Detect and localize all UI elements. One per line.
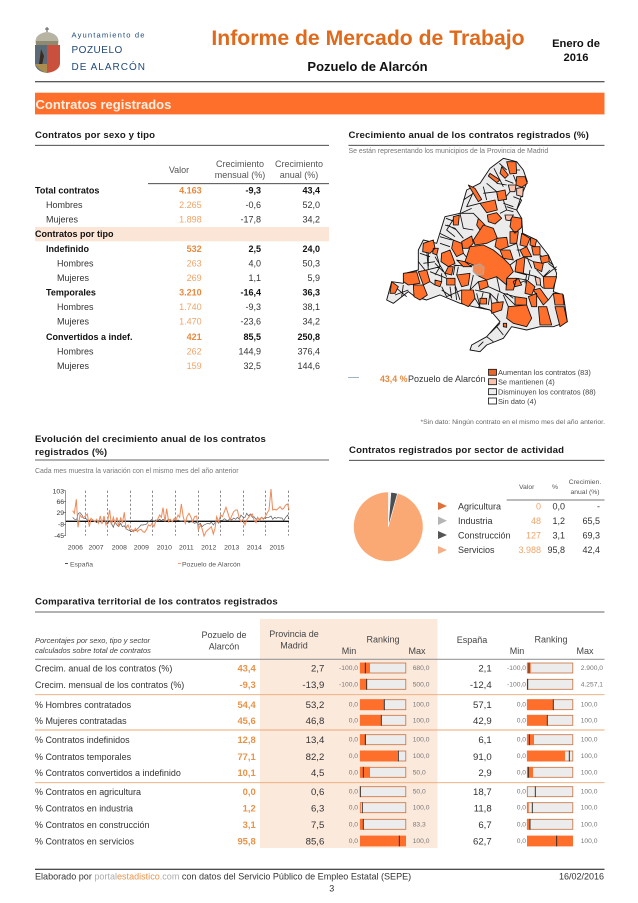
ranking bars: Madrid: 100,0: [413, 805, 430, 812]
table rows: 34,2: [302, 214, 320, 224]
table rows: Mujeres: [57, 316, 90, 326]
section banner: Contratos registrados: [36, 97, 171, 112]
icon: triangle markers: [438, 502, 447, 554]
map note: Se están representando los municipios de la Provincia de Madrid: [348, 148, 548, 155]
ranking bars: Madrid: -100,0: [339, 665, 358, 672]
table header: [169, 159, 323, 180]
logo: Ayuntamiento de Pozuelo de Alarcón: DE ALARCÓN: [72, 60, 146, 73]
table rows: 1.470: [179, 316, 202, 326]
logo: Ayuntamiento de Pozuelo de Alarcón: [35, 27, 146, 73]
table header: Min: [342, 646, 356, 656]
ranking bars: España: 100,0: [581, 821, 598, 828]
ranking bars: España: 0,0: [517, 838, 526, 845]
España values: 2,1: [478, 664, 492, 674]
table header: Ranking: [366, 634, 400, 644]
Madrid values: -13,9: [302, 680, 324, 691]
ranking bars: Madrid: 680,0: [413, 665, 430, 672]
line chart: 29: [56, 510, 64, 517]
table rows: 52,0: [302, 200, 320, 210]
ranking bars: Madrid: 0,0: [349, 737, 358, 744]
España values: 6,1: [478, 735, 492, 746]
panel: comparativa territorial: [35, 596, 604, 848]
table rows: 5,9: [307, 273, 320, 283]
sector table: Construcción: [458, 530, 511, 540]
icon: coat of arms: [35, 27, 60, 73]
table rows: Hombres: [46, 200, 83, 210]
line chart: [53, 488, 289, 568]
table rows: Hombres: [57, 346, 94, 356]
ranking bars: Madrid: 83,3: [413, 821, 426, 828]
table rows: Mujeres: [57, 361, 90, 371]
ranking bars: Madrid: 0,0: [349, 838, 358, 845]
sector table: 65,5: [582, 516, 600, 526]
line chart: 103: [53, 488, 64, 496]
ranking bars: Madrid: 100,0: [413, 737, 430, 744]
España values: 42,9: [473, 716, 492, 727]
table rows: Convertidos a indef.: [46, 332, 133, 342]
ranking bars: Madrid: 0,0: [349, 769, 358, 776]
table rows: -16,4: [240, 288, 261, 298]
chart legend: [65, 562, 241, 568]
Madrid values: 46,8: [306, 716, 324, 727]
table rows: 421: [187, 332, 202, 342]
ranking bars: España: 0,0: [517, 789, 526, 796]
España values: 57,1: [473, 700, 492, 711]
heading: registrados (%): [35, 447, 107, 458]
row labels: Crecim. anual de los contratos (%): [35, 664, 172, 674]
sector table: 1,2: [552, 516, 565, 526]
ranking bars: España: 0,0: [517, 717, 526, 724]
row labels: % Contratos en construcción: [35, 820, 149, 830]
Pozuelo values: [237, 662, 256, 846]
table rows: -0,6: [245, 200, 261, 210]
sector table: 48: [531, 516, 541, 526]
table rows: 269: [187, 273, 202, 283]
Madrid values: [302, 664, 325, 848]
ranking bars: Madrid: 100,0: [413, 717, 430, 724]
ranking bars: España: 100,0: [581, 789, 598, 796]
ranking bars: Madrid: 0,0: [349, 717, 358, 724]
table rows: 376,4: [297, 346, 320, 356]
map legend: categories: Aumentan los contratos (83): [498, 368, 591, 377]
highlighted municipality: Pozuelo de Alarcón: [473, 264, 484, 275]
ranking bars: España: 100,0: [581, 769, 598, 776]
sector table: Crecimien.: [569, 479, 601, 486]
line chart: 66: [56, 499, 64, 506]
table rows: 3.210: [179, 288, 202, 298]
table header: Porcentajes por sexo, tipo y sector: [35, 636, 151, 645]
España values: 2,9: [478, 768, 492, 779]
sector table: %: [552, 484, 558, 491]
footer: 3: [329, 884, 334, 894]
row labels: % Contratos temporales: [35, 752, 132, 762]
map legend: categories: [488, 368, 596, 406]
map legend: Pozuelo value: [348, 374, 486, 384]
ranking bars: España: 0,0: [517, 702, 526, 709]
sector table: 0,0: [552, 502, 565, 512]
table rows: 2.265: [179, 200, 202, 210]
row labels: Crecim. mensual de los contratos (%): [35, 680, 184, 690]
table rows: 263: [187, 258, 202, 268]
Pozuelo values: 0,0: [243, 786, 256, 797]
panel: crecimiento anual map: [348, 130, 605, 426]
panel: contratos por sector de actividad: [349, 445, 604, 561]
series: España: [73, 513, 289, 532]
Pozuelo values: 54,4: [237, 699, 256, 710]
table header: Max: [576, 646, 594, 656]
sector table: -: [597, 502, 600, 512]
table header: Pozuelo de: [201, 630, 247, 640]
ranking bars: Madrid: -100,0: [339, 681, 358, 688]
table rows: Temporales: [46, 288, 96, 298]
table header: calculados sobre total de contratos: [35, 646, 151, 655]
table rows: 144,9: [238, 346, 261, 356]
row labels: % Contratos convertidos a indefinido: [35, 768, 181, 778]
panel: contratos por sexo y tipo: [35, 130, 329, 371]
table header: Max: [408, 646, 426, 656]
España values: 91,0: [473, 752, 492, 763]
table rows: 36,3: [302, 288, 320, 298]
table header: España: [457, 635, 487, 645]
España values: -12,4: [470, 680, 492, 691]
table rows: 144,6: [297, 361, 320, 371]
heading: Crecimiento anual de los contratos registrados (%): [348, 130, 589, 141]
table header: Ranking: [534, 634, 568, 644]
chart legend: Pozuelo de Alarcón: [182, 562, 241, 568]
table header: Crecimiento: [275, 159, 323, 169]
ranking bars: España: 0,0: [517, 769, 526, 776]
table rows: Hombres: [57, 258, 94, 268]
line chart: 2010: [157, 544, 172, 552]
table rows: -17,8: [240, 214, 261, 224]
ranking bars: España: 0,0: [517, 737, 526, 744]
logo: Ayuntamiento de Pozuelo de Alarcón: Ayuntamiento de: [72, 30, 146, 40]
Pozuelo values: 95,8: [237, 836, 256, 846]
sector table: Agricultura: [458, 502, 501, 512]
date: 2016: [564, 52, 588, 64]
table rows: 4,0: [248, 258, 261, 268]
table rows: 532: [187, 244, 202, 254]
line chart: 2011: [179, 544, 194, 552]
Pozuelo values: 1,2: [243, 802, 256, 814]
ranking bars: Madrid: 50,0: [413, 769, 426, 776]
Madrid values: 7,5: [311, 820, 324, 831]
Pozuelo values: -9,3: [240, 679, 256, 690]
map legend: Pozuelo value: Pozuelo de Alarcón: [408, 374, 486, 384]
table rows: Indefinido: [46, 244, 89, 254]
row labels: % Hombres contratados: [35, 700, 132, 710]
Provincia de Madrid column background: [260, 619, 438, 848]
map legend: Pozuelo value: 43,4 %: [380, 374, 408, 384]
sector table: anual (%): [570, 489, 600, 496]
table rows: 1.740: [179, 302, 202, 312]
Madrid values: 6,3: [311, 804, 324, 814]
ranking bars: España: 100,0: [581, 737, 598, 744]
table rows: 85,5: [243, 332, 261, 342]
ranking bars: España: 100,0: [581, 717, 598, 724]
date: Enero de: [552, 38, 600, 50]
table rows: 24,0: [302, 244, 320, 254]
ranking bars: Madrid: 0,0: [349, 789, 358, 796]
sector table: 3,1: [552, 530, 565, 540]
España values: 11,8: [474, 804, 492, 814]
row labels: % Contratos en industria: [35, 804, 133, 814]
Pozuelo values: 12,8: [237, 734, 256, 745]
ranking bars: España: 0,0: [517, 805, 526, 812]
ranking bars: Madrid: 0,0: [349, 805, 358, 812]
table rows: 1.898: [179, 214, 202, 224]
table header: Provincia de: [269, 629, 319, 639]
heading: [35, 434, 266, 458]
map of Madrid municipalities: [387, 158, 567, 352]
row labels: [35, 664, 184, 846]
ranking bars: Madrid: 500,0: [413, 681, 430, 688]
España values: [470, 664, 492, 848]
table rows: Mujeres: [57, 273, 90, 283]
ranking bars: Madrid: [339, 663, 430, 846]
Madrid values: 82,2: [306, 752, 324, 763]
table header: Min: [510, 646, 524, 656]
ranking bars: Madrid: 100,0: [413, 753, 430, 760]
table rows: 32,5: [243, 361, 261, 371]
table header: Madrid: [280, 640, 308, 650]
table rows: 262: [187, 346, 202, 356]
sector table: Servicios: [458, 545, 495, 555]
heading: Contratos por sexo y tipo: [35, 130, 155, 141]
table rows: -9,3: [245, 302, 261, 312]
line chart: 2012: [201, 544, 216, 552]
chart legend: España: [70, 562, 93, 568]
sector table: [438, 479, 604, 555]
table rows: Contratos por tipo: [35, 229, 114, 239]
Pozuelo values: 10,1: [237, 767, 256, 778]
table header: Crecimiento: [216, 159, 264, 169]
footer: Elaborado por portalestadistico.com con datos del Servicio Público de Empleo Estatal (SEPE): [35, 872, 411, 882]
sector table: 3.988: [518, 545, 541, 555]
table rows: Total contratos: [35, 186, 99, 196]
table rows: 1,1: [248, 273, 261, 283]
Pozuelo values: 45,6: [237, 715, 256, 726]
title: Informe de Mercado de Trabajo: [211, 27, 525, 50]
table rows: Hombres: [57, 302, 94, 312]
table rows: 34,2: [302, 316, 320, 326]
line chart: 2013: [224, 544, 239, 552]
ranking bars: España: 0,0: [517, 753, 526, 760]
Madrid values: 0,6: [311, 787, 324, 798]
map footnote: *Sin dato: Ningún contrato en el mismo mes del año anterior.: [420, 419, 605, 426]
ranking bars: Madrid: 0,0: [349, 702, 358, 709]
ranking bars: Madrid: 100,0: [413, 702, 430, 709]
Madrid values: 2,7: [311, 664, 324, 674]
row labels: % Contratos en agricultura: [35, 787, 141, 797]
subtitle: Pozuelo de Alarcón: [307, 59, 428, 74]
footer: [35, 869, 604, 894]
ranking bars: España: 0,0: [517, 821, 526, 828]
line chart: 2007: [88, 544, 104, 552]
line chart: 2006: [68, 544, 83, 552]
España values: 6,7: [478, 820, 492, 831]
sector table: 127: [526, 530, 541, 540]
ranking bars: Madrid: 100,0: [413, 838, 430, 845]
ranking bars: España: 2.900,0: [581, 665, 603, 672]
line chart: 2008: [112, 544, 127, 552]
Madrid values: 13,4: [306, 735, 325, 746]
Madrid values: 53,2: [306, 700, 324, 711]
table rows: Mujeres: [46, 214, 79, 224]
heading: Evolución del crecimiento anual de los contratos: [35, 434, 266, 445]
table rows: -9,3: [245, 186, 261, 196]
footer: 16/02/2016: [559, 872, 604, 882]
row labels: % Contratos en servicios: [35, 836, 135, 846]
logo: Ayuntamiento de Pozuelo de Alarcón: POZUELO: [72, 45, 123, 56]
line chart: 2009: [134, 544, 149, 552]
Pozuelo values: 77,1: [237, 751, 256, 762]
sector table: 69,3: [582, 530, 600, 540]
table rows: 50,3: [302, 258, 320, 268]
map legend: categories: Sin dato (4): [498, 397, 536, 406]
table header: mensual (%): [215, 170, 265, 180]
Madrid values: 85,6: [306, 836, 324, 848]
series: Pozuelo de Alarcón: [73, 489, 289, 536]
ranking bars: España: 100,0: [581, 805, 598, 812]
sector table: 42,4: [582, 545, 600, 555]
sector table: 0: [536, 502, 541, 512]
heading: Comparativa territorial de los contratos registrados: [35, 596, 278, 608]
ranking bars: España: 100,0: [581, 702, 598, 709]
panel: evolución: [35, 434, 329, 568]
ranking bars: Madrid: 0,0: [349, 821, 358, 828]
row labels: % Contratos indefinidos: [35, 735, 130, 745]
pie chart: [354, 492, 423, 561]
Pozuelo values: 43,4: [237, 662, 256, 674]
row labels: % Mujeres contratadas: [35, 716, 127, 726]
table rows: 4.163: [179, 186, 202, 196]
table rows: 159: [187, 361, 202, 371]
ranking bars: España: -100,0: [507, 681, 526, 688]
section banner: [35, 93, 604, 114]
ranking bars: España: 4.257,1: [581, 681, 603, 688]
table rows: 250,8: [297, 332, 320, 342]
line chart: -8: [58, 522, 64, 528]
map legend: categories: Se mantienen (4): [498, 378, 555, 386]
heading: Contratos registrados por sector de actividad: [349, 445, 564, 456]
map legend: categories: Disminuyen los contratos (88): [498, 388, 596, 396]
table header: [35, 629, 594, 656]
sector table: 95,8: [547, 545, 565, 555]
ranking bars: España: [507, 663, 603, 846]
ranking bars: Madrid: 0,0: [349, 753, 358, 760]
España values: 62,7: [473, 836, 492, 848]
table rows: 2,5: [248, 244, 261, 254]
ranking bars: España: 100,0: [581, 753, 598, 760]
table rows: 38,1: [302, 302, 320, 312]
table rows: -23,6: [240, 316, 261, 326]
table header: Alarcón: [209, 642, 239, 652]
ranking bars: Madrid: 50,0: [413, 789, 426, 796]
table rows: 43,4: [302, 186, 320, 196]
table header: anual (%): [280, 170, 318, 180]
table header: Valor: [169, 165, 189, 175]
ranking bars: España: -100,0: [507, 665, 526, 672]
Madrid values: 4,5: [311, 768, 324, 779]
table rows: [35, 186, 320, 371]
line chart: 2015: [269, 544, 285, 552]
note: Cada mes muestra la variación con el mismo mes del año anterior: [35, 468, 239, 475]
line chart: -45: [54, 533, 64, 540]
Pozuelo values: 3,1: [243, 819, 256, 830]
sector table: Industria: [458, 516, 493, 526]
España values: 18,7: [473, 787, 492, 798]
date: [552, 38, 600, 64]
ranking bars: España: 100,0: [581, 838, 598, 845]
line chart: 2014: [247, 544, 262, 552]
sector table: Valor: [519, 484, 535, 491]
